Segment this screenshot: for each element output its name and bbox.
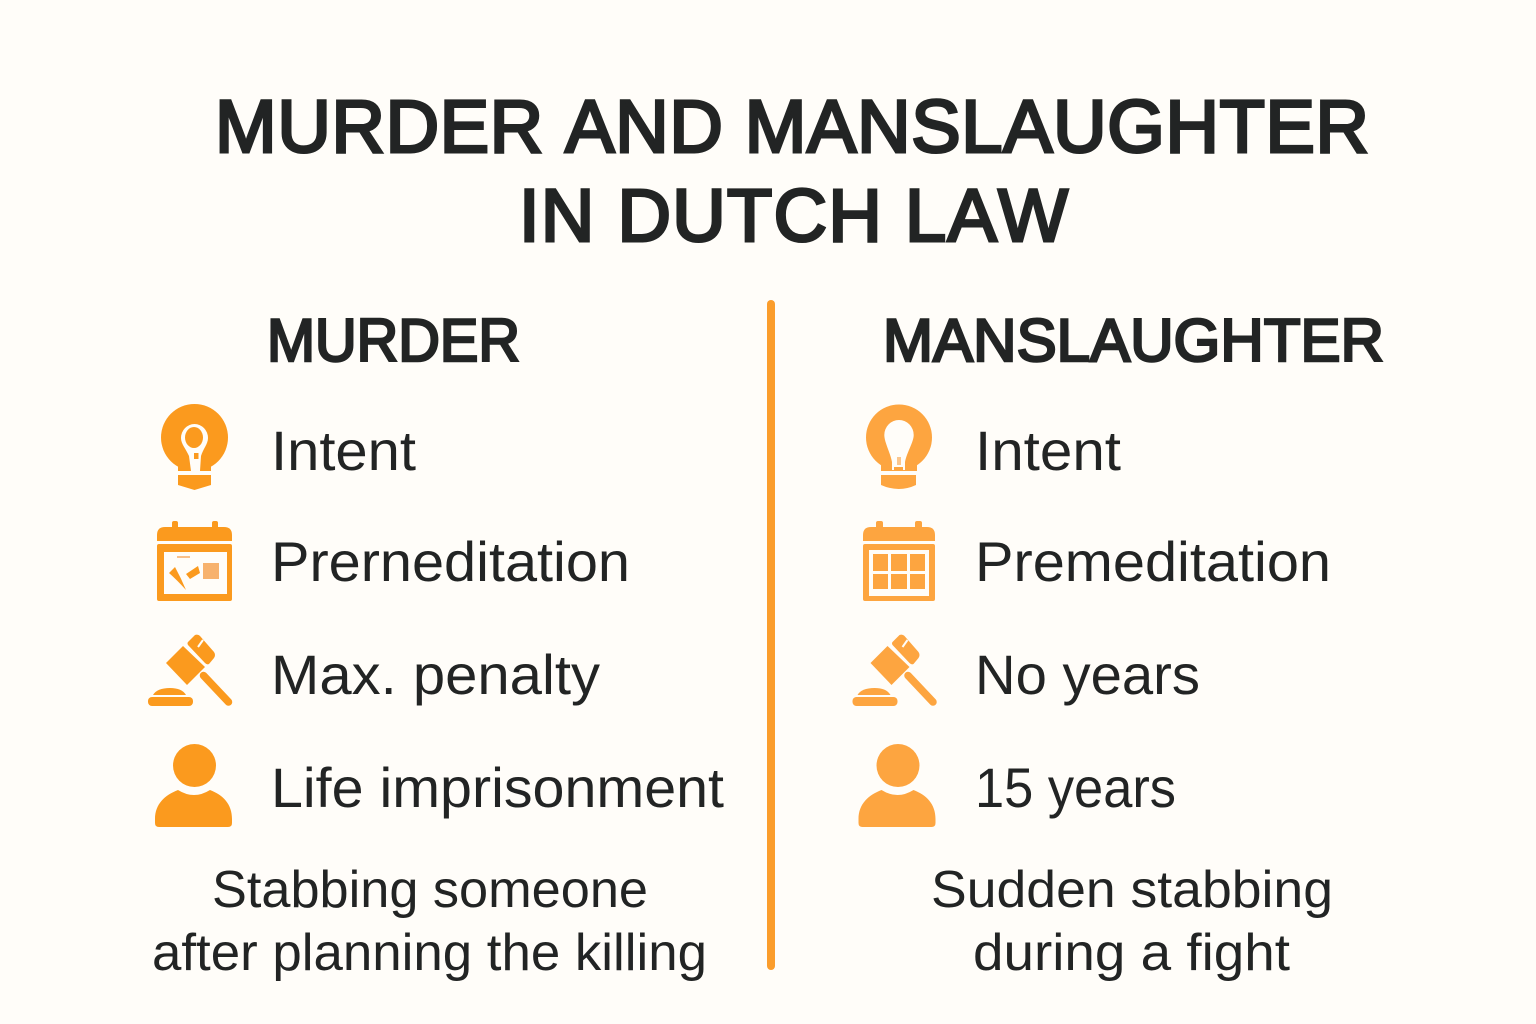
text: intent: Intent xyxy=(975,419,1121,482)
icon: person (murder) xyxy=(155,744,232,827)
caption: murder example: Stabbing someone xyxy=(212,861,648,919)
icon: light bulb (manslaughter) xyxy=(866,404,932,489)
text: intent: Intent xyxy=(271,419,416,482)
caption: manslaughter example xyxy=(931,861,1333,982)
text: no years: No years xyxy=(975,643,1200,706)
text: prerneditation: Prerneditation xyxy=(271,530,630,593)
panel: murder xyxy=(148,307,724,982)
caption: manslaughter example: during a fight xyxy=(973,924,1291,982)
text: max penalty: Max. penalty xyxy=(271,643,600,706)
icon: gavel (murder) xyxy=(148,635,228,706)
caption: murder example xyxy=(152,861,707,982)
heading: murder: MURDER xyxy=(267,307,520,374)
center divider xyxy=(767,300,775,970)
text: 15 years: 15 years xyxy=(975,756,1176,819)
icon: calendar (manslaughter) xyxy=(863,521,935,601)
caption: manslaughter example: Sudden stabbing xyxy=(931,861,1333,919)
text: premeditation: Premeditation xyxy=(975,530,1331,593)
title xyxy=(215,85,1369,257)
icon: light bulb (murder) xyxy=(161,404,228,490)
panel: manslaughter xyxy=(852,307,1384,982)
title: MURDER AND MANSLAUGHTER xyxy=(215,85,1369,168)
heading: manslaughter: MANSLAUGHTER xyxy=(883,307,1384,374)
caption: murder example: after planning the killing xyxy=(152,924,707,982)
icon: person (manslaughter) xyxy=(858,744,936,827)
icon: calendar (murder) xyxy=(157,521,232,601)
text: life imprisonment: Life imprisonment xyxy=(271,756,724,819)
icon: gavel (manslaughter) xyxy=(852,635,933,706)
title: IN DUTCH LAW xyxy=(519,174,1068,257)
